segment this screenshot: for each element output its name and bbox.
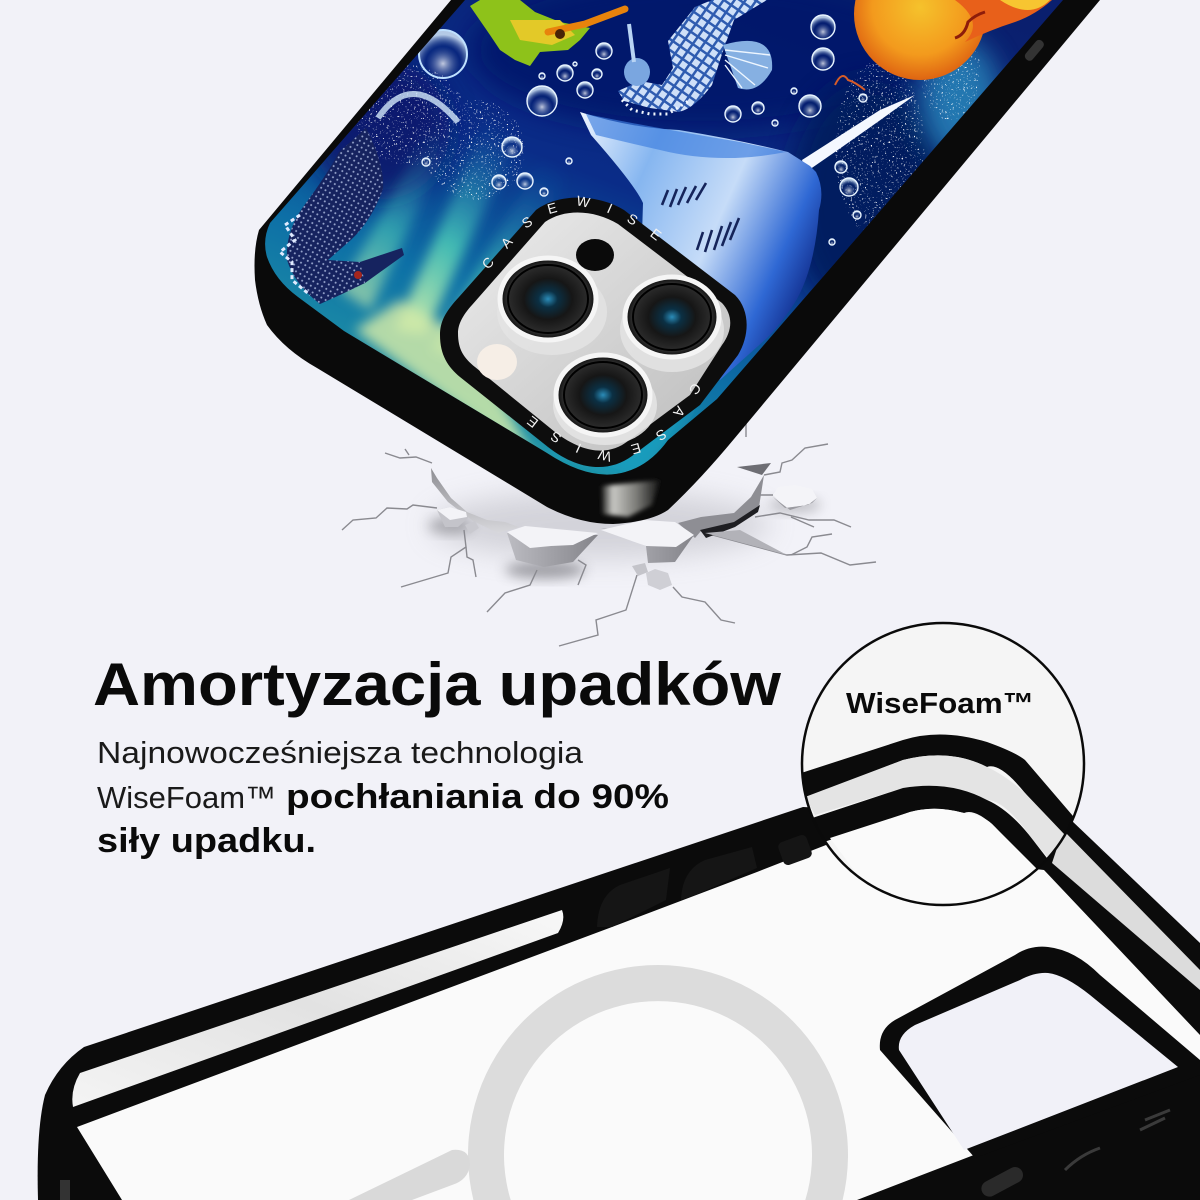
printed artwork bbox=[250, 0, 1080, 490]
flash bbox=[477, 344, 517, 380]
clear back interior bbox=[77, 845, 1200, 1200]
body text: Najnowocześniejsza technologia bbox=[97, 735, 584, 770]
white arc bbox=[378, 94, 458, 122]
cutout window bbox=[899, 973, 1178, 1150]
phone body in camera opening bbox=[458, 212, 730, 451]
lens islands bbox=[497, 269, 724, 445]
phone with case bbox=[254, 0, 1100, 524]
sensor bbox=[576, 239, 614, 271]
port bbox=[979, 1164, 1026, 1199]
orange fish bbox=[835, 0, 1052, 90]
body text: pochłaniania do 90% bbox=[286, 778, 669, 816]
light rays bbox=[338, 133, 694, 474]
camera plate bbox=[440, 196, 747, 467]
callout: WiseFoam magnifier bbox=[795, 623, 1085, 905]
magnified interior bbox=[830, 808, 1036, 870]
slab left wall bbox=[431, 468, 519, 533]
case frame bbox=[38, 807, 1200, 1200]
chunk right bbox=[601, 520, 694, 563]
MagSafe ring bbox=[468, 965, 848, 1200]
lens 2 bbox=[625, 277, 719, 357]
large bubble bbox=[419, 30, 467, 78]
body text: siły upadku. bbox=[97, 822, 316, 860]
magnified inner band bbox=[814, 786, 1047, 868]
brand text: lower ring: CASEWISE bbox=[526, 384, 700, 462]
bumper glare bbox=[601, 480, 660, 517]
left slot bbox=[60, 1180, 70, 1200]
left gap bbox=[72, 910, 563, 1107]
small chunks bbox=[437, 507, 672, 590]
cracked ground bbox=[342, 420, 876, 646]
seahorse: pale blue bbox=[618, 0, 772, 114]
MagSafe stem bbox=[349, 1150, 470, 1200]
side buttons bbox=[597, 834, 813, 927]
callout label: WiseFoam™ bbox=[846, 688, 1034, 720]
body text: WiseFoam™ bbox=[97, 780, 276, 815]
slab right wall bbox=[678, 475, 764, 538]
magnified outer band bbox=[804, 734, 1073, 834]
lens 1 bbox=[500, 258, 596, 340]
seahorse: green bbox=[470, 0, 625, 66]
right gap bbox=[1052, 830, 1200, 990]
camera cutout bbox=[880, 947, 1200, 1158]
bubbles bbox=[422, 15, 867, 245]
magnified gap bbox=[805, 755, 1065, 860]
bottom case: open clear case bbox=[38, 807, 1200, 1200]
chunk left bbox=[507, 526, 598, 567]
bottom edge detail bbox=[1065, 1110, 1170, 1170]
side button bbox=[1023, 38, 1046, 62]
speckles bbox=[357, 51, 980, 230]
body text bbox=[97, 735, 669, 860]
seahorse: dark left bbox=[280, 128, 404, 304]
manta ray bbox=[580, 95, 915, 380]
case bumper bbox=[254, 0, 1100, 524]
lens 3 bbox=[556, 355, 650, 435]
brand text: upper ring: CASEWISE bbox=[483, 196, 662, 268]
title: Amortyzacja upadków bbox=[93, 651, 781, 718]
